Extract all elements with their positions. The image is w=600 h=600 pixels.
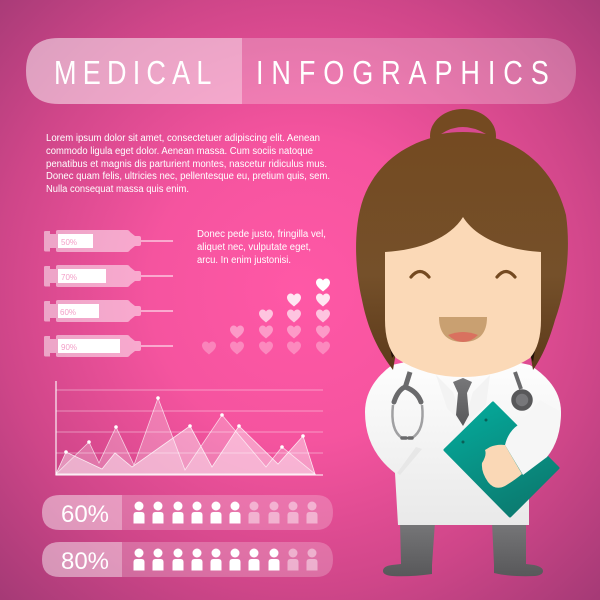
area chart: [56, 381, 323, 475]
neck shadow: [388, 338, 537, 362]
syringe 60%: 60%: [60, 308, 76, 317]
stat bar 60%: [42, 495, 333, 530]
hair bun: [430, 109, 496, 163]
intro paragraph: commodo ligula eget dolor. Aenean massa. Cum sociis natoque: [46, 146, 313, 157]
tie: [453, 378, 472, 426]
collar: [436, 375, 490, 426]
doctor character: [356, 109, 568, 576]
syringe 90%: 90%: [61, 343, 77, 352]
stat bar 80%: 80%: [61, 548, 109, 575]
side paragraph: [197, 229, 326, 266]
intro paragraph: Nulla consequat massa quis enim.: [46, 184, 189, 195]
title banner: [26, 38, 576, 104]
bun gap: [441, 127, 486, 134]
side paragraph: aliquet nec, vulputate eget,: [197, 242, 311, 253]
syringe 50%: 50%: [61, 238, 77, 247]
eyes: [411, 272, 515, 277]
intro paragraph: Lorem ipsum dolor sit amet, consectetuer adipiscing elit. Aenean: [46, 133, 320, 144]
stethoscope: [392, 372, 530, 438]
side paragraph: Donec pede justo, fringilla vel,: [197, 229, 326, 240]
stat bar 80%: [42, 542, 333, 577]
hair back: [356, 133, 568, 370]
side paragraph: arcu. In enim justonisi.: [197, 255, 291, 266]
heart chart: [202, 278, 330, 354]
intro paragraph: [46, 133, 330, 195]
stat bar 60%: 60%: [61, 501, 109, 528]
syringe chart: [44, 230, 173, 357]
title text: infographics: INFOGRAPHICS: [256, 56, 549, 92]
hand and sleeve: [482, 400, 561, 488]
intro paragraph: penatibus et magnis dis parturient montes, nascetur ridiculus mus.: [46, 159, 327, 170]
intro paragraph: Donec quam felis, ultricies nec, pellentesque eu, pretium quis, sem.: [46, 171, 330, 182]
legs: [383, 522, 543, 576]
clipboard: [445, 403, 558, 516]
face: [385, 217, 541, 377]
lab coat: [365, 350, 561, 525]
title text: medical: MEDICAL: [54, 56, 211, 92]
clipboard pins: [462, 418, 488, 444]
mouth: [439, 317, 487, 342]
coat arm fold: [397, 447, 422, 475]
syringe 70%: 70%: [61, 273, 77, 282]
